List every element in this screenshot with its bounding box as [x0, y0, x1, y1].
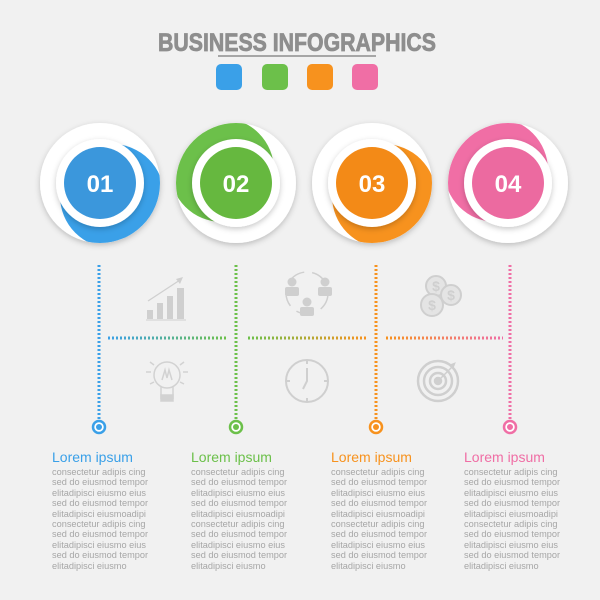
- text: column 1: consectetur adipis cing: [52, 519, 145, 529]
- timeline dots: [93, 421, 516, 433]
- text: column 1: elitadipisci eiusmoadipi: [52, 509, 146, 519]
- text: column 4: consectetur adipis cing: [464, 519, 557, 529]
- title: BUSINESS INFOGRAPHICS: [158, 29, 436, 57]
- text: column 2: sed do eiusmod tempor: [191, 498, 287, 508]
- text: column 3: sed do eiusmod tempor: [331, 529, 427, 539]
- text: column 2: sed do eiusmod tempor: [191, 477, 287, 487]
- timeline lines: [99, 265, 510, 420]
- text: column 4: sed do eiusmod tempor: [464, 498, 560, 508]
- text: column 1: consectetur adipis cing: [52, 467, 145, 477]
- color squares: [216, 64, 378, 90]
- icon: clock: [286, 360, 328, 402]
- text: column 1: sed do eiusmod tempor: [52, 498, 148, 508]
- icon: target: [418, 361, 458, 401]
- icon: coins: $: [447, 287, 455, 303]
- text: column 2: [191, 449, 287, 571]
- circle 03: [312, 123, 436, 248]
- text: column 4: elitadipisci eiusmo: [464, 561, 539, 571]
- circle 04: [444, 118, 568, 243]
- text: column 3: elitadipisci eiusmo eius: [331, 488, 425, 498]
- text: column 2: Lorem ipsum: [191, 449, 272, 465]
- icon: coins: $: [432, 278, 440, 294]
- text: column 4: elitadipisci eiusmo eius: [464, 540, 558, 550]
- icon: bar chart: [146, 277, 186, 320]
- text: column 2: consectetur adipis cing: [191, 467, 284, 477]
- circle 02: 02: [223, 171, 249, 198]
- text: column 3: consectetur adipis cing: [331, 519, 424, 529]
- text: column 4: elitadipisci eiusmo eius: [464, 488, 558, 498]
- text: column 3: elitadipisci eiusmo eius: [331, 540, 425, 550]
- icon: coins: $: [428, 297, 436, 313]
- text: column 2: elitadipisci eiusmo eius: [191, 488, 285, 498]
- text: column 3: consectetur adipis cing: [331, 467, 424, 477]
- circle 01: 01: [87, 171, 113, 198]
- text: column 1: sed do eiusmod tempor: [52, 529, 148, 539]
- circle 01: [40, 123, 164, 248]
- main graphic: [37, 32, 571, 434]
- text: column 1: sed do eiusmod tempor: [52, 477, 148, 487]
- text: column 3: [331, 449, 427, 571]
- text: column 4: sed do eiusmod tempor: [464, 529, 560, 539]
- text: column 2: elitadipisci eiusmo eius: [191, 540, 285, 550]
- text: column 2: elitadipisci eiusmo: [191, 561, 266, 571]
- text: column 4: consectetur adipis cing: [464, 467, 557, 477]
- text: column 1: [52, 449, 148, 571]
- icon: people: [285, 272, 332, 316]
- circle 02: [170, 118, 296, 243]
- text: column 2: elitadipisci eiusmoadipi: [191, 509, 285, 519]
- text: column 1: elitadipisci eiusmo eius: [52, 488, 146, 498]
- text: column 3: sed do eiusmod tempor: [331, 550, 427, 560]
- icon: light bulb: [146, 362, 188, 401]
- text: column 1: elitadipisci eiusmo: [52, 561, 127, 571]
- text: column 4: sed do eiusmod tempor: [464, 477, 560, 487]
- text: column 3: elitadipisci eiusmo: [331, 561, 406, 571]
- circle 04: 04: [495, 171, 522, 198]
- text: column 1: sed do eiusmod tempor: [52, 550, 148, 560]
- text: column 4: [464, 449, 560, 571]
- text: column 2: sed do eiusmod tempor: [191, 529, 287, 539]
- text: column 4: Lorem ipsum: [464, 449, 545, 465]
- text: column 3: sed do eiusmod tempor: [331, 477, 427, 487]
- text: column 2: sed do eiusmod tempor: [191, 550, 287, 560]
- text: column 3: elitadipisci eiusmoadipi: [331, 509, 425, 519]
- text: column 4: elitadipisci eiusmoadipi: [464, 509, 558, 519]
- text: column 4: sed do eiusmod tempor: [464, 550, 560, 560]
- text: column 1: elitadipisci eiusmo eius: [52, 540, 146, 550]
- text: column 1: Lorem ipsum: [52, 449, 133, 465]
- text: column 3: Lorem ipsum: [331, 449, 412, 465]
- icon: coins: [421, 276, 461, 316]
- circle 03: 03: [359, 171, 385, 198]
- text: column 2: consectetur adipis cing: [191, 519, 284, 529]
- text: column 3: sed do eiusmod tempor: [331, 498, 427, 508]
